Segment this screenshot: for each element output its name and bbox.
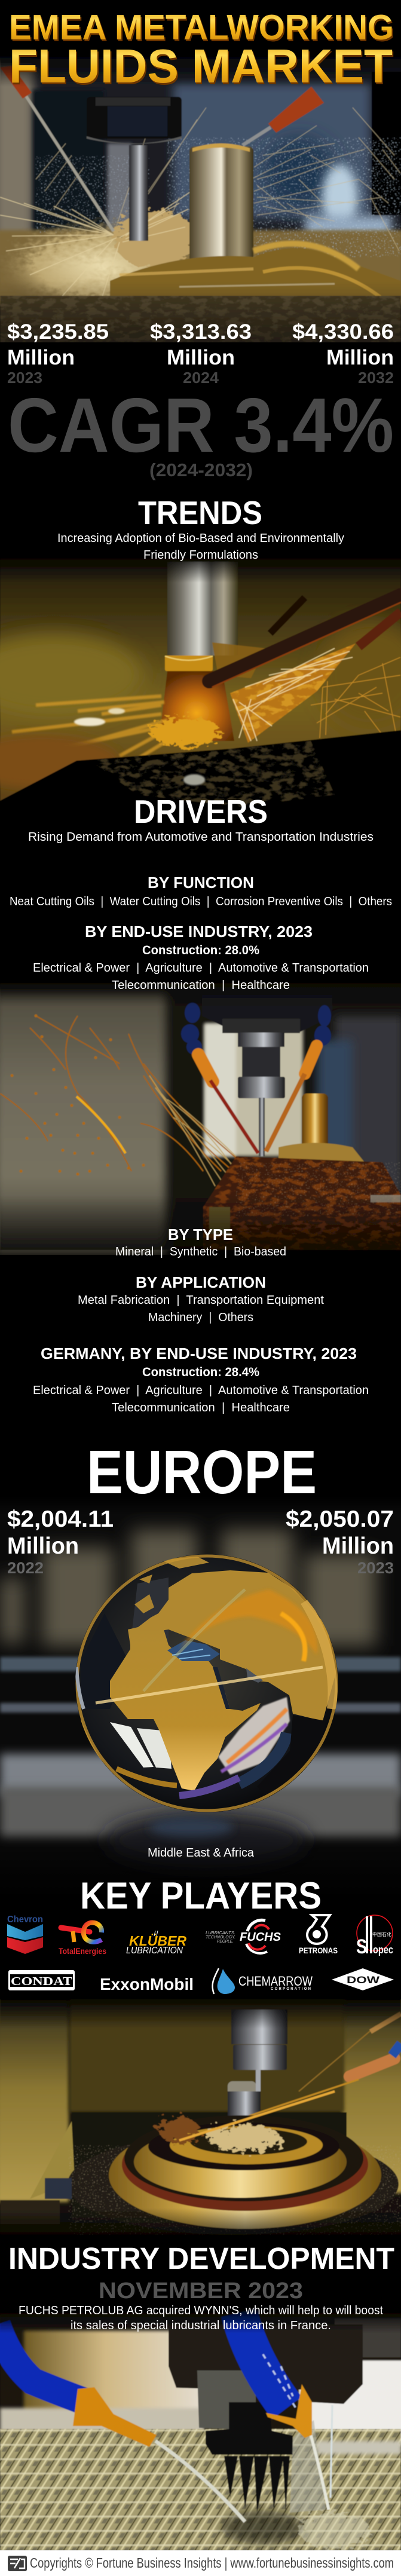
hero photo: milling spindle with sparks [0, 0, 401, 342]
market size stat: 2023: $3,235.85 [7, 320, 109, 344]
Europe stat: 2022: $2,004.11 [7, 1506, 114, 1532]
by end-use industry segment: BY END-USE INDUSTRY, 2023 [85, 923, 313, 941]
oil splash [0, 1016, 245, 1171]
logo: TotalEnergies [59, 1923, 106, 1956]
market size stat: 2032: $4,330.66 [292, 320, 394, 344]
trends text [57, 532, 344, 562]
logo: Dow [332, 1968, 394, 1990]
logo: Sinopec: S [356, 1935, 367, 1958]
Germany by end-use industry segment: GERMANY, BY END-USE INDUSTRY, 2023 [41, 1344, 357, 1362]
logo: Chemarrow: CHEMARROW [238, 1974, 313, 1989]
glass globe [75, 1554, 338, 1812]
logo: Klüber Lubrication: LUBRICATION [126, 1946, 183, 1956]
region label: Middle East & Africa [148, 1846, 255, 1860]
industry development photo: coolant over mesh [0, 2307, 401, 2550]
market size stat: 2032: 2032 [358, 369, 394, 387]
footer bar [0, 2550, 401, 2576]
gold base [159, 671, 234, 741]
blue hoses [181, 1003, 331, 1055]
logo: Chemarrow [213, 1968, 313, 1994]
by application segment: Machinery | Others [148, 1311, 253, 1324]
logo: Petronas: PETRONAS [299, 1946, 338, 1955]
by end-use industry segment [33, 923, 369, 992]
lens bottom [117, 1769, 177, 1785]
drivers heading: DRIVERS [134, 793, 268, 830]
splash left [12, 696, 191, 759]
key players heading: KEY PLAYERS [80, 1875, 322, 1917]
market size stat: 2024: $3,313.63 [150, 320, 252, 344]
comb cutter [206, 2402, 293, 2455]
logo: Condat [8, 1970, 75, 1990]
by type segment: Mineral | Synthetic | Bio-based [115, 1245, 286, 1258]
by type segment [115, 1226, 286, 1258]
logo: Sinopec: 中国石化 [372, 1931, 391, 1938]
by application segment [78, 1273, 324, 1324]
by function segment [10, 874, 392, 908]
Europe stat: 2023: 2023 [357, 1559, 394, 1577]
gold rim [77, 1556, 336, 1811]
drivers text: Rising Demand from Automotive and Transportation Industries [28, 831, 374, 844]
Arabian Gulf [246, 1668, 263, 1683]
Germany by end-use industry segment: Telecommunication | Healthcare [112, 1401, 290, 1414]
Europe stat: 2023: $2,050.07 [286, 1506, 394, 1532]
left orange nozzle [73, 2387, 157, 2447]
logo: Condat: CONDAT [11, 1975, 73, 1988]
development text: its sales of special industrial lubricants in France. [71, 2319, 331, 2332]
mesh floor [0, 2429, 401, 2550]
Europe stat: 2023 [286, 1506, 394, 1577]
droplets [12, 1016, 143, 1174]
industry development heading: INDUSTRY DEVELOPMENT [8, 2241, 394, 2275]
by end-use industry segment: Telecommunication | Healthcare [112, 979, 290, 992]
development text: FUCHS PETROLUB AG acquired WYNN'S, which will help to will boost [19, 2304, 383, 2317]
Europe stat: 2023: Million [322, 1533, 394, 1559]
logos block backing [0, 1910, 401, 1999]
CAGR period: (2024-2032) [149, 460, 253, 480]
collar [165, 656, 213, 671]
Germany by end-use industry segment [33, 1344, 369, 1414]
spindle [202, 992, 332, 1033]
logo: Dow: DOW [347, 1974, 380, 1986]
logo: Chevron [7, 1915, 43, 1954]
title [9, 8, 395, 94]
water sheet [290, 2420, 326, 2513]
tool block [169, 2324, 363, 2404]
market size stat: 2024: 2024 [183, 369, 219, 387]
logo: Chemarrow: CORPORATION [271, 1987, 311, 1991]
right coolant nozzle [350, 2059, 394, 2076]
brass rings [68, 2133, 399, 2235]
shaft [228, 2091, 261, 2142]
globe backdrop [0, 1497, 401, 1900]
drivers photo: oil stream on tool [0, 553, 401, 820]
left nozzle and rod [26, 96, 114, 231]
Eurasia land [128, 1570, 336, 1721]
Germany by end-use industry segment: Electrical & Power | Agriculture | Automotive & Transportation [33, 1384, 369, 1397]
orange nozzles and rods [198, 1055, 213, 1082]
Europe islands [134, 1557, 209, 1613]
logo: Klüber Lubrication: KLÜBER [129, 1933, 186, 1949]
Europe stat: 2022: 2022 [7, 1559, 44, 1577]
logo: Sinopec [356, 1915, 393, 1958]
logo: Fuchs: PEOPLE. [217, 1938, 234, 1944]
development text [19, 2304, 383, 2332]
by application segment: Metal Fabrication | Transportation Equipment [78, 1294, 324, 1307]
gold base [110, 248, 401, 305]
market size stat: 2024: Million [167, 346, 235, 369]
segment photo: spindle with twin coolant nozzles [0, 971, 401, 1255]
tool [259, 1098, 265, 1156]
development date: NOVEMBER 2023 [99, 2278, 303, 2304]
by type segment: BY TYPE [168, 1226, 233, 1243]
logo: Fuchs: TECHNOLOGY. [206, 1934, 235, 1940]
logo: Chevron: Chevron [7, 1915, 43, 1925]
right blue hose [239, 2312, 287, 2408]
right dark limb [268, 1715, 323, 1797]
spindle collars [231, 2010, 287, 2044]
brass part [302, 1094, 328, 1147]
left blue hose [0, 2324, 90, 2403]
logo: ExxonMobil: ExxonMobil [100, 1975, 194, 1993]
title: EMEA METALWORKING [9, 8, 394, 47]
spray [0, 218, 212, 314]
Africa land [110, 1629, 261, 1791]
window reflection [110, 1722, 154, 1768]
trends heading: TRENDS [138, 494, 262, 531]
logo: Fuchs [206, 1920, 281, 1953]
title: EMEA METALWORKING [10, 10, 395, 49]
Red Sea [213, 1667, 230, 1709]
upper reflection [130, 1578, 169, 1649]
holder [87, 97, 182, 139]
Germany by end-use industry segment: Construction: 28.4% [142, 1365, 259, 1379]
oil stream [230, 644, 356, 743]
by end-use industry segment: Electrical & Power | Agriculture | Automotive & Transportation [33, 961, 369, 975]
delivery rods [209, 595, 401, 681]
workpiece [189, 146, 253, 263]
orange swirl [179, 1589, 317, 1655]
by function segment: BY FUNCTION [148, 874, 254, 892]
logo: TotalEnergies: TotalEnergies [59, 1946, 106, 1956]
sparks [36, 108, 400, 251]
right orange nozzle [266, 2384, 312, 2438]
Mediterranean [167, 1640, 220, 1661]
shaft [129, 145, 148, 241]
right nozzle and rod [243, 127, 271, 145]
logo: Petronas [299, 1915, 338, 1955]
title: FLUIDS MARKET [9, 39, 393, 93]
dark ground [0, 730, 401, 820]
by end-use industry segment: Construction: 28.0% [142, 944, 259, 957]
market size stat: 2023 [7, 320, 109, 387]
Europe stat: 2022: Million [7, 1533, 79, 1559]
red-orange splash mass [203, 1156, 401, 1250]
Europe heading: EUROPE [87, 1438, 317, 1506]
logo: Fuchs: FUCHS [240, 1931, 281, 1944]
logo: Klüber Lubrication [126, 1931, 186, 1956]
logo: Sinopec: opec [373, 1944, 393, 1956]
market size stat: 2023: Million [7, 346, 75, 369]
trends text: Friendly Formulations [143, 549, 258, 562]
bright backdrop [204, 1024, 303, 1156]
market size stat: 2032: Million [326, 346, 394, 369]
key players photo: spindle over brass rings [0, 1996, 401, 2330]
market size stat: 2024 [150, 320, 252, 387]
icon: Fortune Business Insights logo [8, 2556, 27, 2571]
trends text: Increasing Adoption of Bio-Based and Environmentally [57, 532, 344, 545]
market size stat: 2023: 2023 [7, 369, 42, 387]
sparks right [311, 657, 400, 741]
title: FLUIDS MARKET [10, 41, 394, 94]
speck spray [167, 137, 401, 257]
lower-right colour swirl [218, 1697, 290, 1775]
market size stat: 2032 [292, 320, 394, 387]
shaft [167, 562, 238, 656]
by application segment: BY APPLICATION [136, 1273, 266, 1291]
logo: Fuchs: LUBRICANTS. [206, 1930, 235, 1935]
Europe stat: 2022 [7, 1506, 114, 1577]
